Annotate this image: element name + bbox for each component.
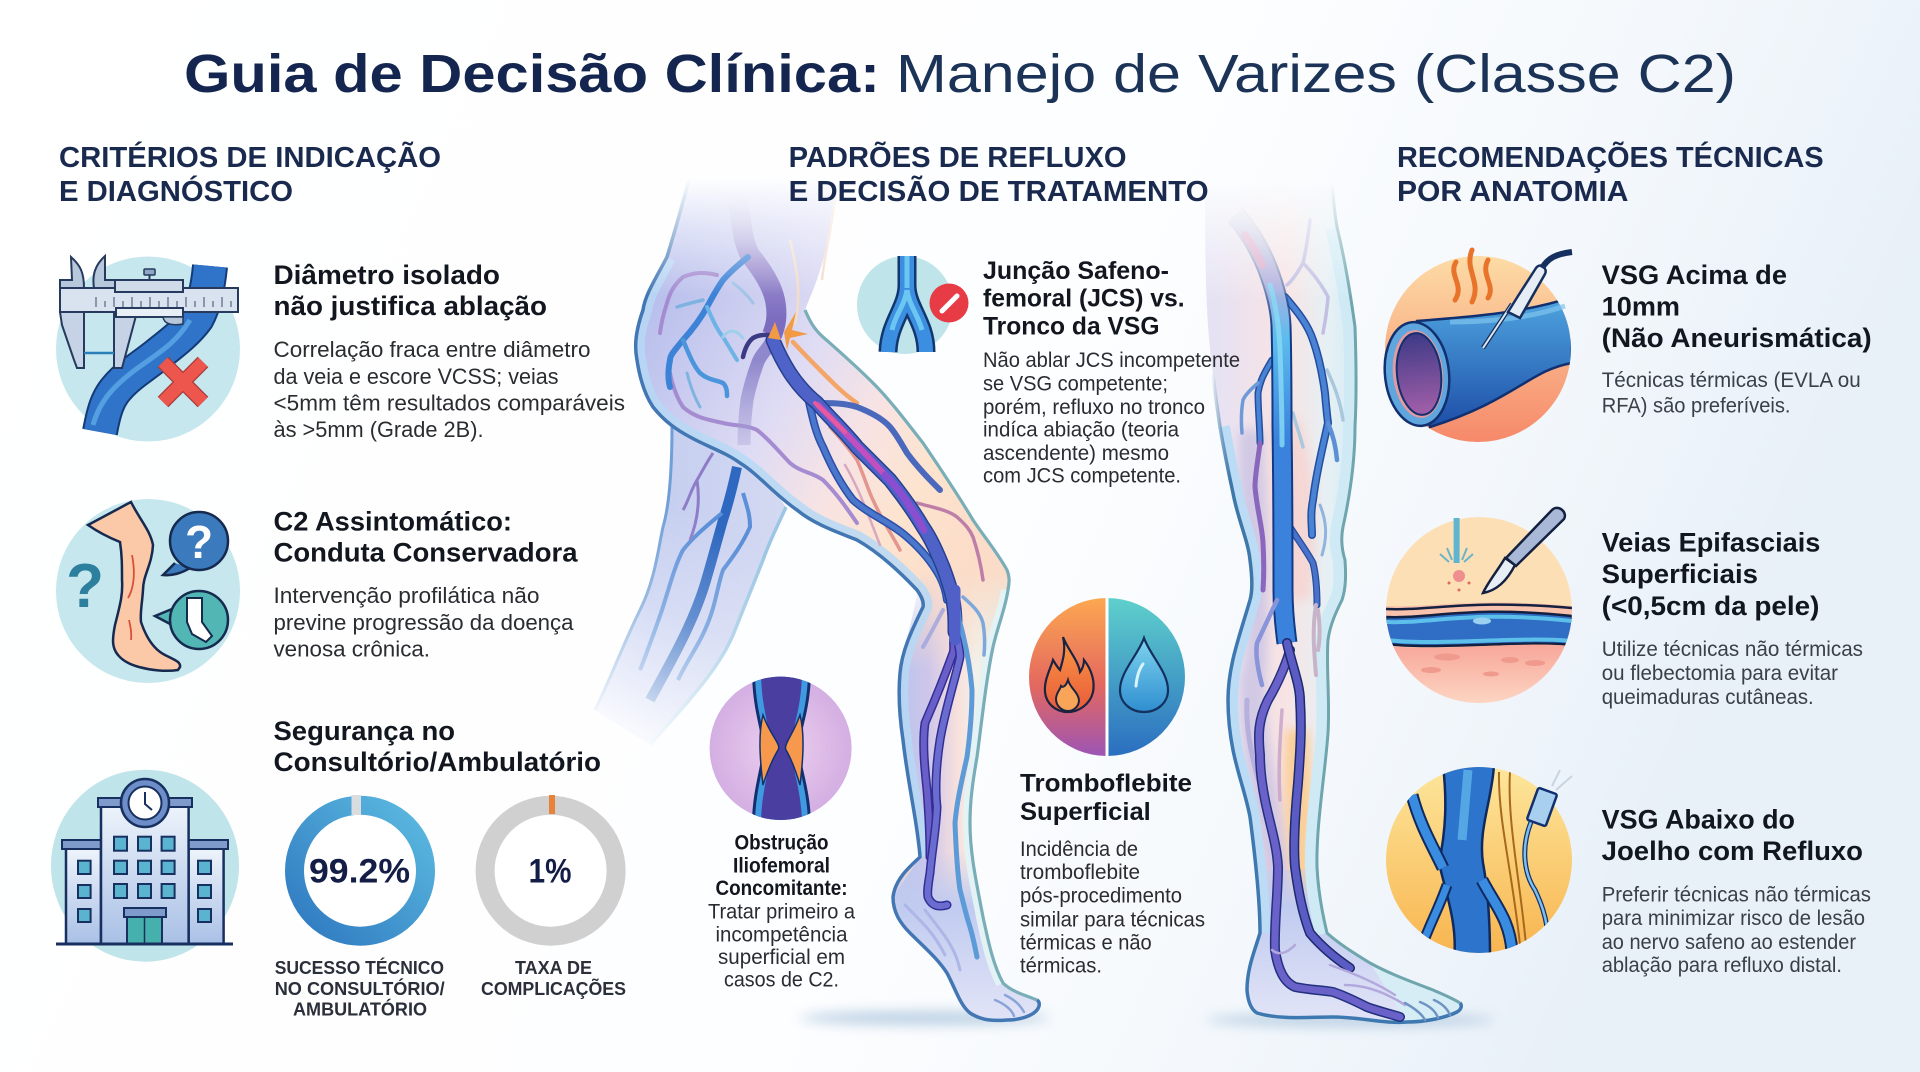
- icon: iliofemoral obstruction: [710, 670, 852, 825]
- text block: VSG above 10mm: (Não Aneurismática): [1602, 323, 1872, 353]
- chart: complication rate donut 1%: [481, 795, 626, 999]
- panel: technical recommendations column: [1380, 140, 1872, 977]
- text block: epifascial veins: (<0,5cm da pele): [1602, 591, 1820, 621]
- heading: criteria section: E DIAGNÓSTICO: [59, 174, 293, 208]
- text block: junction vs trunk: Não ablar JCS incompetente: [983, 349, 1240, 372]
- text block: VSG above 10mm: VSG Acima de: [1602, 260, 1787, 290]
- heading: criteria section: CRITÉRIOS DE INDICAÇÃO: [59, 140, 441, 174]
- text block: junction vs trunk: com JCS competente.: [983, 464, 1181, 487]
- text block: VSG below the knee: [1602, 804, 1871, 977]
- text block: epifascial veins: queimaduras cutâneas.: [1602, 686, 1814, 709]
- text block: diameter: às >5mm (Grade 2B).: [274, 417, 484, 442]
- icon: caliper over vein with red X: [56, 256, 240, 442]
- vein: orange reflux branches: [793, 342, 983, 580]
- text block: diameter: não justifica ablação: [274, 291, 547, 321]
- heading: criteria section: [59, 140, 441, 208]
- text block: superficial thrombophlebitis: térmicas e não: [1020, 931, 1152, 954]
- text block: asymptomatic C2: Conduta Conservadora: [274, 538, 578, 568]
- text block: junction vs trunk: [983, 257, 1240, 487]
- chart: complication rate donut 1%: COMPLICAÇÕES: [481, 978, 626, 999]
- text block: diameter: da veia e escore VCSS; veias: [274, 364, 558, 389]
- text block: iliofemoral obstruction: Tratar primeiro a: [708, 900, 855, 923]
- chart: complication rate donut 1%: 1%: [529, 853, 571, 891]
- heading: recommendations section: RECOMENDAÇÕES TÉCNICAS: [1397, 140, 1824, 174]
- chart: technical success donut 99.2%: AMBULATÓRIO: [293, 999, 427, 1020]
- text block: VSG below the knee: Preferir técnicas não térmicas: [1602, 884, 1871, 907]
- icon: heated vein tube with catheter: [1380, 250, 1572, 442]
- icon: below-knee vein and saphenous nerve: [1386, 765, 1572, 958]
- text block: iliofemoral obstruction: Iliofemoral: [733, 855, 830, 878]
- text block: epifascial veins: Superficiais: [1602, 559, 1758, 589]
- vein: blue thigh branches: [668, 257, 753, 407]
- vein: purple calf veins and foot: [1247, 600, 1450, 1020]
- icon: leg with questions and compression sock: [56, 499, 240, 683]
- icon: saphenofemoral junction with prohibition sign: [857, 256, 968, 354]
- vein: main saphenous trunk with branches: [743, 335, 955, 632]
- text block: asymptomatic C2: Intervenção profilática não: [274, 583, 540, 608]
- heading: reflux section: E DECISÃO DE TRATAMENTO: [789, 174, 1209, 208]
- panel: criteria column: [51, 140, 626, 1020]
- text block: VSG below the knee: ao nervo safeno ao estender: [1602, 931, 1856, 954]
- text block: junction vs trunk: Tronco da VSG: [983, 312, 1160, 340]
- text block: VSG above 10mm: 10mm: [1602, 292, 1680, 322]
- text block: asymptomatic C2: [274, 507, 578, 662]
- text block: iliofemoral obstruction: [708, 831, 855, 992]
- panel: reflux patterns column: [708, 140, 1240, 992]
- heading: reflux section: PADRÕES DE REFLUXO: [789, 140, 1127, 174]
- text block: superficial thrombophlebitis: Incidência de: [1020, 838, 1138, 861]
- icon: flame and water drop: [1029, 598, 1185, 756]
- illustration: bent leg with veins: [595, 175, 1050, 1025]
- text block: asymptomatic C2: previne progressão da doença: [274, 610, 574, 635]
- text block: iliofemoral obstruction: incompetência: [716, 924, 848, 947]
- text block: junction vs trunk: indíca abiação (teoria: [983, 419, 1179, 442]
- text block: junction vs trunk: femoral (JCS) vs.: [983, 285, 1185, 313]
- text block: epifascial veins: [1602, 528, 1863, 709]
- icon: clinic building with clock: [51, 770, 239, 962]
- vein: purple arc on the thigh: [660, 273, 857, 523]
- text block: superficial thrombophlebitis: pós-procedimento: [1020, 885, 1182, 908]
- heading: recommendations section: POR ANATOMIA: [1397, 176, 1629, 208]
- title: [184, 44, 1736, 104]
- text block: iliofemoral obstruction: superficial em: [718, 946, 845, 969]
- text block: diameter: Correlação fraca entre diâmetro: [274, 337, 590, 362]
- chart: technical success donut 99.2%: SUCESSO TÉCNICO: [275, 957, 444, 978]
- icon: leg with questions and compression sock: ?: [185, 516, 213, 568]
- chart: technical success donut 99.2%: NO CONSULTÓRIO/: [275, 978, 445, 999]
- text block: diameter: Diâmetro isolado: [274, 260, 500, 290]
- chart: technical success donut 99.2%: [275, 795, 445, 1020]
- chart: complication rate donut 1%: TAXA DE: [515, 957, 592, 978]
- text block: superficial thrombophlebitis: [1020, 770, 1205, 978]
- text block: asymptomatic C2: venosa crônica.: [274, 637, 430, 662]
- text block: office safety heading: Segurança no: [274, 716, 455, 746]
- text block: VSG below the knee: Joelho com Refluxo: [1602, 836, 1863, 866]
- text block: junction vs trunk: porém, refluxo no tronco: [983, 396, 1205, 419]
- text block: superficial thrombophlebitis: tromboflebite: [1020, 861, 1140, 884]
- text block: iliofemoral obstruction: Concomitante:: [716, 877, 848, 900]
- text block: superficial thrombophlebitis: similar para técnicas: [1020, 909, 1205, 932]
- vein: pale upper branches: [1287, 220, 1343, 447]
- illustration: straight leg with veins: [1205, 180, 1495, 1027]
- heading: recommendations section: [1397, 140, 1824, 208]
- icon: junction highlight: [768, 312, 808, 350]
- text block: asymptomatic C2: C2 Assintomático:: [274, 507, 512, 537]
- text block: office safety heading: Consultório/Ambulatório: [274, 747, 601, 777]
- text block: superficial thrombophlebitis: térmicas.: [1020, 955, 1102, 978]
- text block: VSG below the knee: ablação para refluxo distal.: [1602, 954, 1842, 977]
- icon: leg with questions and compression sock: ?: [66, 552, 104, 621]
- text block: VSG above 10mm: RFA) são preferíveis.: [1602, 395, 1790, 418]
- text block: VSG above 10mm: Técnicas térmicas (EVLA ou: [1602, 369, 1861, 392]
- text block: diameter: [274, 260, 625, 442]
- text block: junction vs trunk: se VSG competente;: [983, 373, 1168, 396]
- heading: reflux section: [789, 140, 1209, 208]
- text block: VSG below the knee: VSG Abaixo do: [1602, 804, 1795, 834]
- text block: junction vs trunk: Junção Safeno-: [983, 257, 1169, 285]
- text block: office safety heading: [274, 716, 601, 777]
- icon: skin layers with laser and scalpel: [1386, 508, 1572, 703]
- text block: iliofemoral obstruction: Obstrução: [734, 831, 828, 854]
- chart: technical success donut 99.2%: 99.2%: [309, 853, 410, 891]
- text block: epifascial veins: ou flebectomia para evitar: [1602, 662, 1838, 685]
- text block: diameter: <5mm têm resultados comparáveis: [274, 391, 625, 416]
- text block: epifascial veins: Veias Epifasciais: [1602, 528, 1820, 558]
- title: Guia de Decisão Clínica:: [184, 44, 880, 104]
- text block: iliofemoral obstruction: casos de C2.: [724, 969, 839, 992]
- text block: junction vs trunk: ascendente) mesmo: [983, 442, 1169, 465]
- text block: superficial thrombophlebitis: Tromboflebite: [1020, 770, 1192, 798]
- title: Manejo de Varizes (Classe C2): [896, 44, 1736, 104]
- text block: superficial thrombophlebitis: Superficial: [1020, 798, 1151, 826]
- text block: epifascial veins: Utilize técnicas não térmicas: [1602, 638, 1863, 661]
- vein: calf branches: [905, 590, 1024, 1016]
- text block: VSG above 10mm: [1602, 260, 1872, 418]
- vein: deep purple femoral band: [738, 200, 776, 445]
- text block: VSG below the knee: para minimizar risco de lesão: [1602, 907, 1865, 930]
- vein: blue trunk and branches: [1235, 215, 1337, 643]
